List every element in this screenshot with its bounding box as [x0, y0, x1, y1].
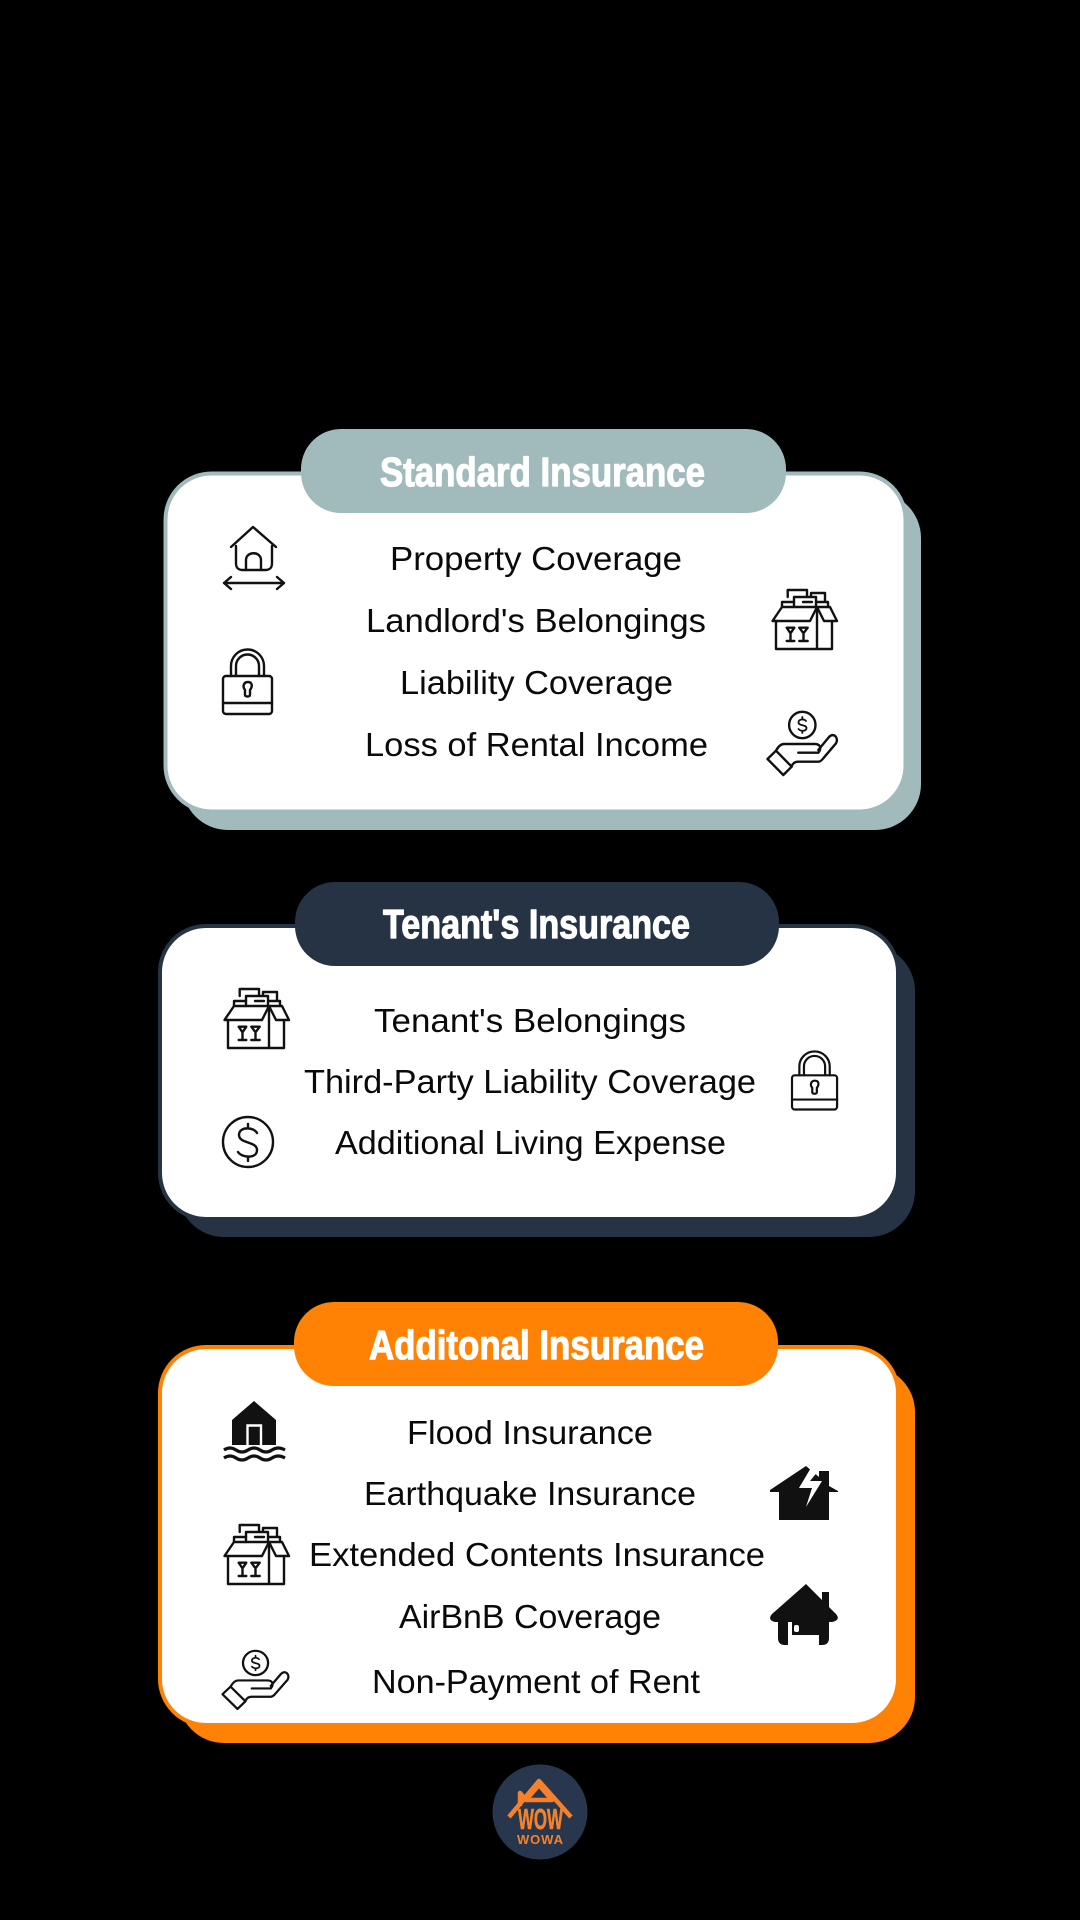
header pill: [295, 882, 779, 966]
card shadow: [182, 492, 921, 830]
card shadow: [178, 1366, 915, 1743]
icon: hand with coin: [768, 712, 837, 775]
icon: hand with coin: [222, 1651, 288, 1709]
card body: [160, 926, 898, 1219]
card shadow: [178, 945, 915, 1237]
header pill: [301, 429, 786, 513]
panel: Standard Insurance: [166, 429, 921, 830]
card body: [166, 474, 906, 812]
item: Flood Insurance: [407, 1415, 653, 1452]
item: Additional Living Expense: [335, 1125, 726, 1162]
item: Non-Payment of Rent: [372, 1664, 701, 1701]
icon: house with bed: [770, 1584, 838, 1645]
panel: Tenant's Insurance: [160, 882, 915, 1237]
icon: box of belongings: [224, 989, 289, 1048]
header pill: [294, 1302, 778, 1386]
logo: WOWA: [492, 1764, 588, 1860]
heading: Standard Insurance: [380, 449, 705, 495]
icon: cracked house earthquake: [770, 1466, 838, 1520]
item: Earthquake Insurance: [364, 1476, 696, 1513]
icon: flooded house: [224, 1401, 285, 1460]
icon: padlock: [792, 1051, 837, 1110]
icon: house with width arrow: [224, 527, 284, 589]
logo mark letters: WOW: [518, 1804, 563, 1836]
heading: Tenant's Insurance: [383, 901, 690, 947]
icon: padlock: [223, 650, 272, 714]
item: Liability Coverage: [400, 665, 673, 702]
icon: box of belongings: [224, 1525, 289, 1584]
item: Tenant's Belongings: [374, 1003, 686, 1040]
logo roof: [509, 1781, 571, 1817]
item: AirBnB Coverage: [399, 1599, 661, 1636]
panel: Additional Insurance: [160, 1302, 915, 1743]
card body: [160, 1347, 898, 1725]
heading: Additonal Insurance: [369, 1322, 704, 1368]
icon: box of belongings: [772, 590, 837, 649]
logo wordmark: WOWA: [517, 1832, 564, 1847]
icon: dollar coin: [223, 1117, 273, 1167]
item: Property Coverage: [390, 541, 682, 578]
item: Landlord's Belongings: [366, 603, 706, 640]
item: Loss of Rental Income: [365, 727, 708, 764]
item: Third-Party Liability Coverage: [304, 1064, 756, 1101]
item: Extended Contents Insurance: [309, 1537, 765, 1574]
